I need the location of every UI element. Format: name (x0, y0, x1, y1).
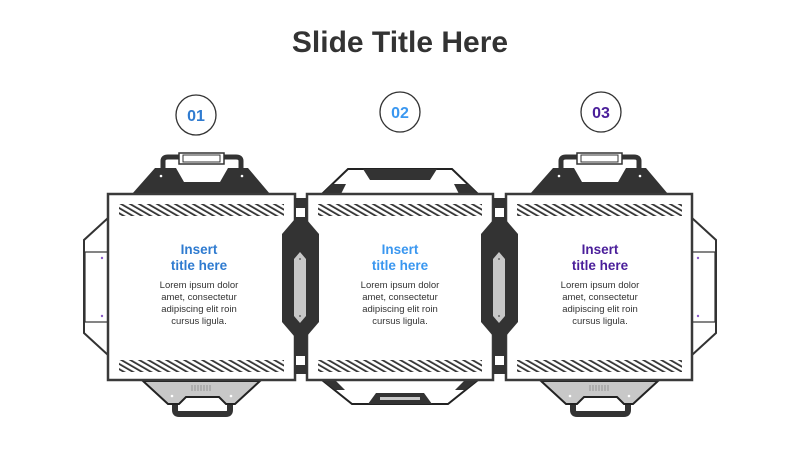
text block 2: adipiscing elit roin (362, 304, 438, 315)
text block 2: title here (372, 258, 429, 273)
text block 3: Lorem ipsum dolor (561, 280, 639, 291)
text block 1: adipiscing elit roin (161, 304, 237, 315)
text block 2: Lorem ipsum dolor (361, 280, 439, 291)
number circle 02 (380, 92, 420, 132)
text block 2 (361, 242, 439, 327)
top handle 3 (530, 153, 668, 194)
top cap 2 (322, 169, 478, 194)
text block 1: cursus ligula. (171, 316, 227, 327)
panel 3 (506, 153, 716, 414)
text block 2: amet, consectetur (362, 292, 438, 303)
text block 2: Insert (382, 242, 419, 257)
text block 3: cursus ligula. (572, 316, 628, 327)
text block 3: Insert (582, 242, 619, 257)
side wing 1 (84, 218, 108, 355)
text block 1: Lorem ipsum dolor (160, 280, 238, 291)
text block 3 (561, 242, 639, 327)
number circle 03 (581, 92, 621, 132)
side wing 3 (692, 218, 716, 355)
text block 1 (160, 242, 238, 327)
connector: left (282, 198, 319, 374)
card 1 (108, 194, 295, 380)
top handle 1 (132, 153, 270, 194)
text block 1: Insert (181, 242, 218, 257)
text block 3: adipiscing elit roin (562, 304, 638, 315)
number circle 03: 03 (592, 105, 610, 122)
card 3 (506, 194, 692, 380)
bottom handle 1 (143, 381, 260, 414)
number circle 02: 02 (391, 105, 409, 122)
number circle 01 (176, 95, 216, 135)
text block 1: amet, consectetur (161, 292, 237, 303)
text block 2: cursus ligula. (372, 316, 428, 327)
card 2 (307, 194, 493, 380)
number circle 01: 01 (187, 108, 205, 125)
text block 1: title here (171, 258, 228, 273)
panel 1 (84, 153, 295, 414)
title: Slide Title Here (292, 26, 508, 59)
bottom handle 3 (541, 381, 658, 414)
bottom cap 2 (322, 380, 478, 404)
connector: right (481, 198, 518, 374)
panel 2 (307, 169, 493, 404)
text block 3: title here (572, 258, 629, 273)
text block 3: amet, consectetur (562, 292, 638, 303)
